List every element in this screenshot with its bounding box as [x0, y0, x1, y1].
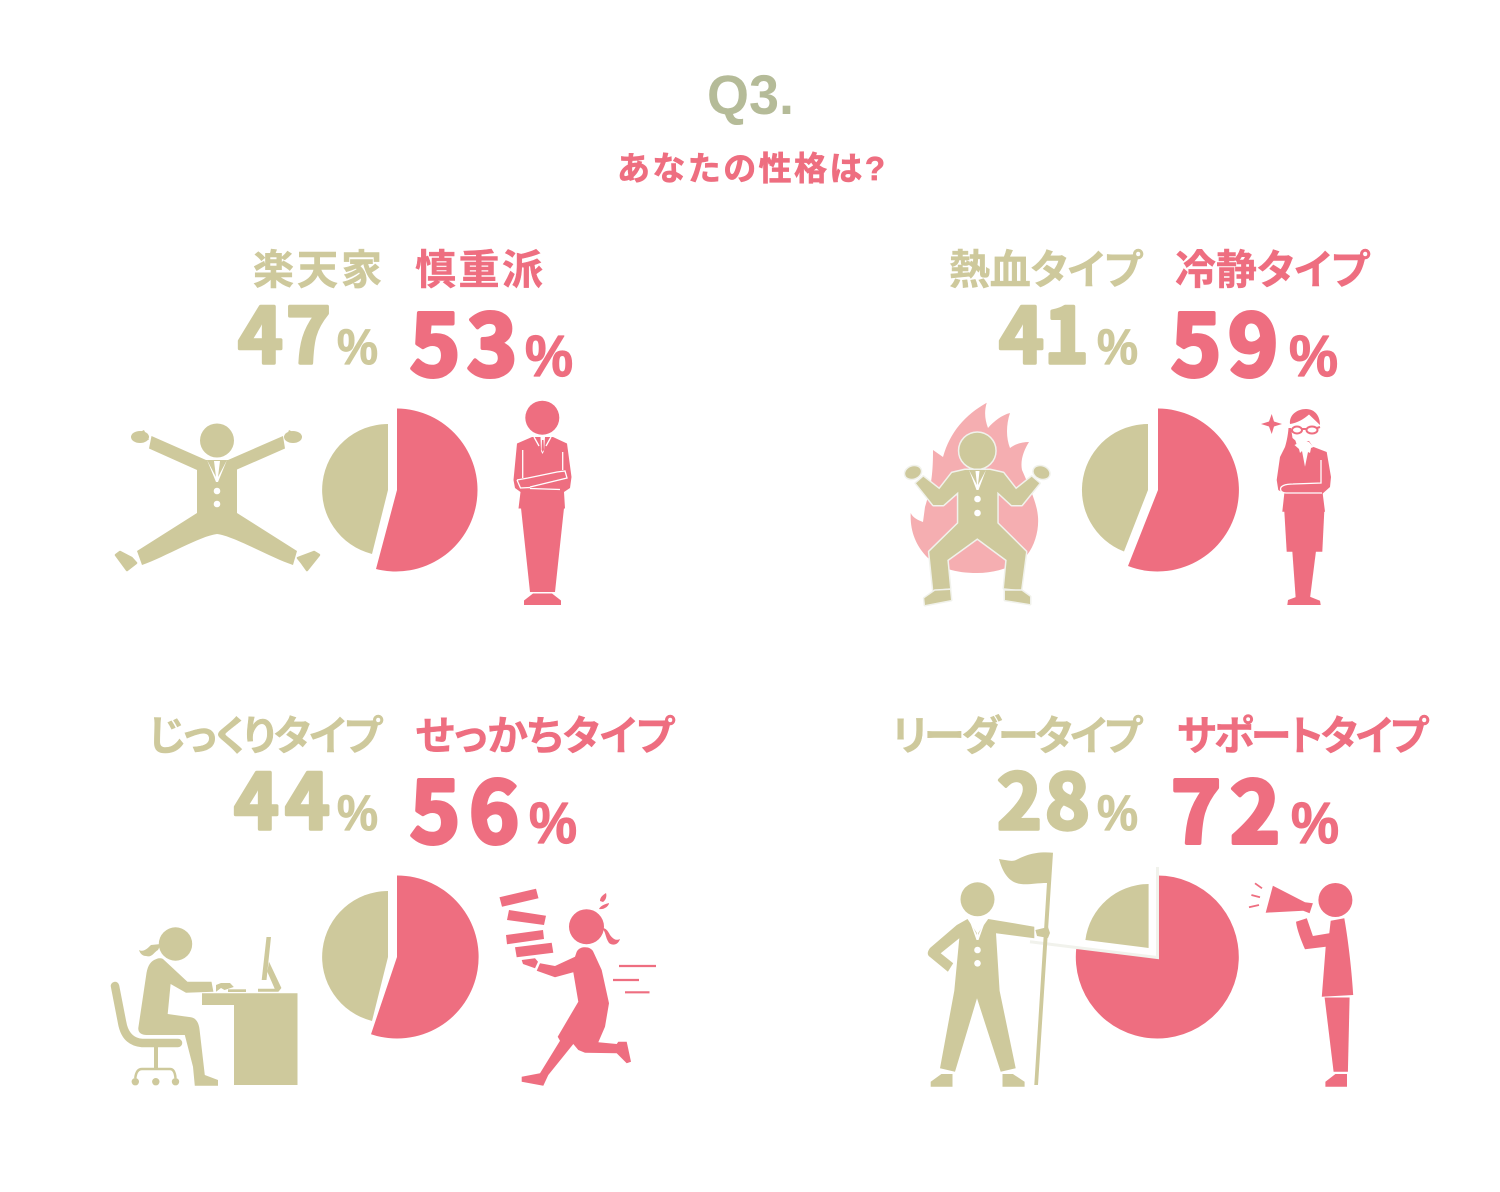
value: 44%: %: [337, 785, 378, 841]
value: 28%: [997, 741, 1138, 851]
label: 冷静タイプ: 冷静タイプ: [1175, 247, 1371, 293]
value: 47%: [238, 275, 378, 385]
value: 41%: [999, 275, 1138, 385]
label: 楽天家: 楽天家: [253, 247, 382, 293]
icon: man in flames: [903, 403, 1051, 605]
value: 41%: %: [1097, 319, 1138, 375]
panel: passionate vs cool: [903, 247, 1371, 605]
value: 53%: %: [525, 324, 573, 389]
value: 72%: 72: [1171, 745, 1280, 868]
icon: woman working at desk: [115, 927, 298, 1086]
label: せっかちタイプ: せっかちタイプ: [416, 713, 676, 759]
label: 慎重派: 慎重派: [415, 247, 543, 293]
value: 44%: 44: [234, 741, 330, 851]
icon: man with folded arms: [514, 401, 572, 605]
pie chart: 47 / 53: [322, 408, 478, 571]
value: 72%: %: [1291, 791, 1339, 856]
icon: jumping man: [116, 424, 319, 570]
value: 72%: [1171, 745, 1339, 868]
value: 47%: 47: [238, 275, 331, 385]
value: 59%: [1171, 278, 1338, 401]
pie chart: 41 / 59: [1082, 408, 1239, 571]
value: 59%: 59: [1171, 278, 1278, 401]
panel: deliberate vs impatient: [115, 713, 676, 1086]
label: 熱血タイプ: 熱血タイプ: [949, 247, 1144, 293]
heading: question: あなたの性格は?: [617, 150, 885, 187]
value: 44%: [234, 741, 378, 851]
pie chart: 44 / 56: [322, 875, 479, 1038]
icon: man holding flag: [928, 852, 1053, 1087]
value: 56%: 56: [410, 745, 519, 868]
value: 28%: %: [1097, 785, 1138, 841]
icon: person with megaphone: [1249, 883, 1353, 1087]
panel: optimist vs cautious: [116, 247, 573, 605]
pie chart: 28 / 72: [1030, 867, 1239, 1038]
panel: leader vs supporter: [892, 713, 1430, 1087]
icon: woman adjusting glasses: [1261, 409, 1331, 605]
icon: running woman with books: [500, 889, 656, 1086]
value: 56%: %: [529, 791, 577, 856]
label: サポートタイプ: サポートタイプ: [1177, 713, 1430, 759]
value: 41%: 41: [999, 275, 1089, 385]
value: 28%: 28: [997, 741, 1090, 851]
label: リーダータイプ: リーダータイプ: [892, 713, 1144, 759]
value: 59%: %: [1289, 324, 1338, 389]
value: 53%: [410, 278, 573, 401]
value: 56%: [410, 745, 577, 868]
label: じっくりタイプ: じっくりタイプ: [148, 713, 384, 759]
value: 53%: 53: [410, 278, 517, 401]
title: Q3.: Q3.: [707, 63, 794, 126]
value: 47%: %: [337, 319, 378, 375]
